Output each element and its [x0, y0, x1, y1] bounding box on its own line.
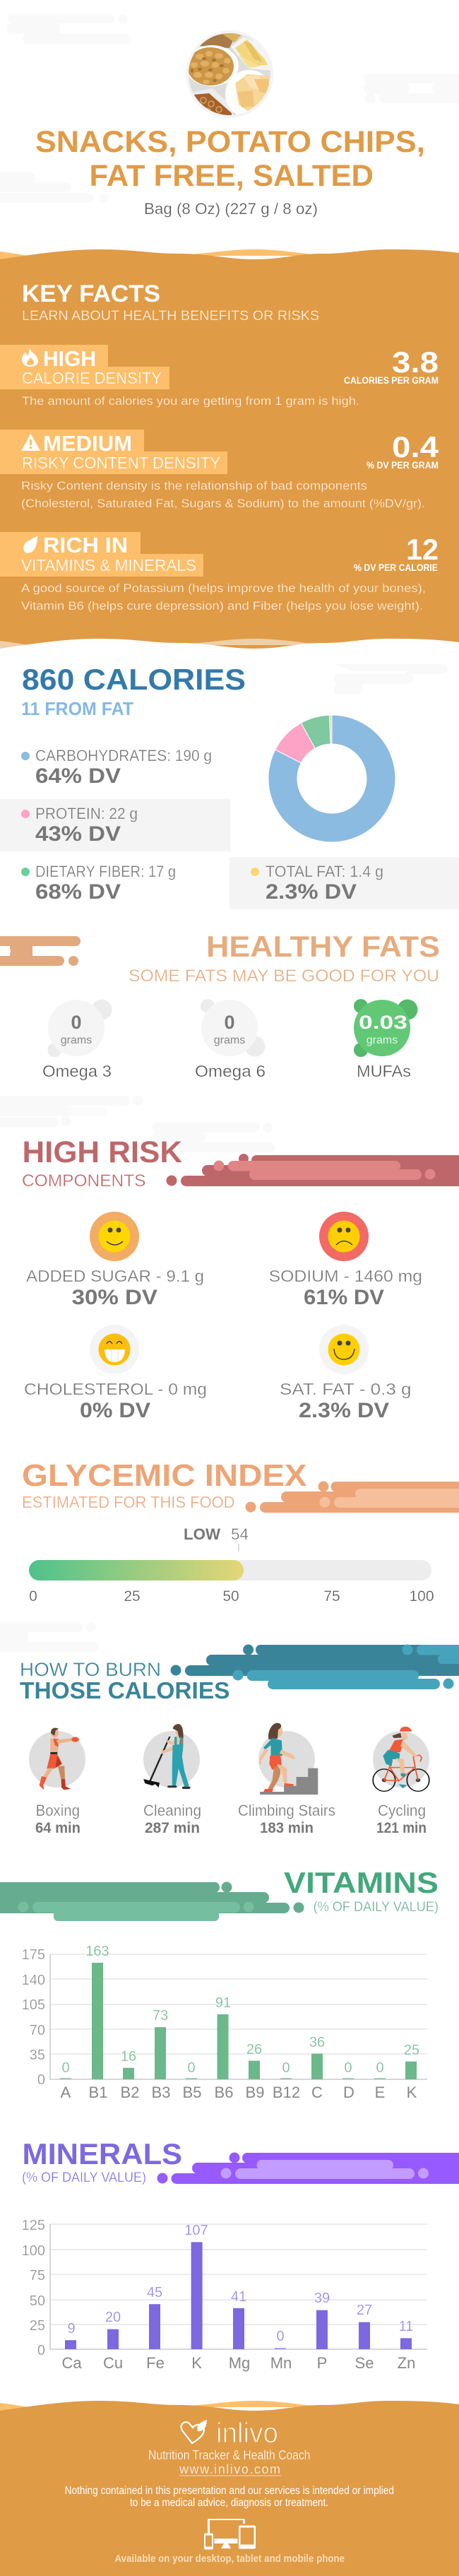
activity: boxing: 64 min [35, 1820, 81, 1836]
heading: key facts: LEARN ABOUT HEALTH BENEFITS OR RISKS [22, 308, 319, 324]
gauge label: low 54 [184, 1525, 249, 1552]
item: added sugar: 30% DV [72, 1286, 157, 1309]
bar chart: minerals: 9 [67, 2321, 76, 2336]
bar chart: vitamins: 0 [376, 2060, 384, 2076]
bar chart: minerals: Mg [229, 2354, 250, 2372]
bar chart: vitamins: 0 [187, 2060, 196, 2076]
bar chart: minerals: 20 [105, 2310, 121, 2325]
availability note: Available on your desktop, tablet and mobile phone [114, 2553, 345, 2565]
icon: cyclist [373, 1727, 429, 1791]
heading: high risk: HIGH RISK [23, 1135, 182, 1169]
legend: total fat: TOTAL FAT: 1.4 g [266, 863, 383, 880]
gauge scale [29, 1588, 434, 1605]
stat: MUFAs: MUFAs [357, 1062, 411, 1080]
serving size subtitle: Bag (8 Oz) (227 g / 8 oz) [144, 200, 318, 218]
bar chart: vitamins: 0 [61, 2060, 70, 2076]
gauge label: low 54: 54 [231, 1525, 249, 1543]
header image: bowl of snacks [185, 30, 274, 120]
heading: key facts [22, 280, 319, 324]
item: added sugar: ADDED SUGAR - 9.1 g [26, 1267, 204, 1285]
activity: cycling [373, 1727, 429, 1836]
heading: healthy fats: SOME FATS MAY BE GOOD FOR YOU [129, 967, 439, 986]
icon: sad face [328, 1221, 360, 1252]
bar chart: minerals: Mn [270, 2354, 292, 2372]
bar chart: minerals: 39 [314, 2291, 330, 2306]
item: sodium [269, 1212, 422, 1309]
heading: vitamins: (% OF DAILY VALUE) [314, 1900, 439, 1915]
decorative banner: burn [171, 1645, 459, 1689]
gauge scale: 25 [124, 1588, 141, 1605]
bar chart: minerals: 0 [276, 2329, 285, 2344]
row: high calorie density: 3.8 [392, 345, 439, 379]
item: added sugar [26, 1212, 204, 1309]
heading: calories: 11 FROM FAT [21, 698, 133, 719]
legend: protein [0, 799, 230, 851]
bar chart: minerals: 107 [184, 2223, 208, 2238]
gauge scale: 0 [29, 1588, 37, 1605]
gauge bar [29, 1560, 431, 1581]
row: medium risky content density: 0.4 [392, 430, 439, 463]
row: rich in vitamins and minerals: 12 [406, 533, 439, 566]
row: high calorie density [0, 345, 439, 408]
title: SNACKS, POTATO CHIPS, [35, 125, 425, 159]
row: medium risky content density: % DV PER GRAM [366, 460, 439, 471]
bar chart: minerals: 27 [357, 2303, 372, 2318]
icon: devices [204, 2519, 256, 2549]
decorative banner: vitamins [0, 1882, 304, 1921]
row: rich in vitamins and minerals [0, 532, 439, 613]
bar chart: vitamins: 26 [246, 2042, 262, 2057]
stat: omega 6 [195, 999, 266, 1080]
stat: MUFAs [354, 999, 418, 1080]
bar chart: vitamins: 0 [282, 2060, 290, 2076]
bar chart: vitamins: B9 [246, 2084, 264, 2101]
row: medium risky content density [0, 430, 439, 510]
bar chart: vitamins: B1 [89, 2084, 107, 2101]
decorative banner: minerals [157, 2152, 459, 2184]
bar chart: minerals: 125 [22, 2218, 45, 2233]
bar chart: vitamins: B3 [152, 2084, 170, 2101]
title [35, 125, 425, 193]
panel: calories [0, 663, 459, 909]
gauge scale: 75 [323, 1588, 340, 1605]
bar chart: vitamins: K [407, 2084, 417, 2101]
bar chart: vitamins: 25 [404, 2043, 419, 2058]
heading: high risk: COMPONENTS [22, 1171, 145, 1190]
legend: protein: PROTEIN: 22 g [35, 805, 138, 822]
row: high calorie density: CALORIES PER GRAM [344, 375, 439, 386]
item: cholesterol [24, 1325, 207, 1422]
icon: grinning face [99, 1334, 130, 1365]
heading: glycemic index: GLYCEMIC INDEX [22, 1458, 307, 1493]
icon: smiling face [99, 1221, 130, 1252]
stat: omega 3: grams [61, 1034, 92, 1046]
bar chart: vitamins: 35 [30, 2048, 45, 2063]
bar chart: vitamins: 36 [309, 2035, 325, 2050]
gauge scale: 50 [222, 1588, 239, 1605]
bar chart: minerals: 0 [37, 2343, 45, 2358]
bar chart: vitamins: 73 [153, 2008, 168, 2023]
item: cholesterol: CHOLESTEROL - 0 mg [24, 1380, 207, 1398]
activity: boxing [29, 1727, 85, 1836]
bar chart: vitamins: 70 [30, 2023, 45, 2038]
gauge scale: 100 [409, 1588, 434, 1605]
bar chart: vitamins: B2 [121, 2084, 139, 2101]
heading: minerals: MINERALS [23, 2137, 182, 2170]
item: sodium: 61% DV [304, 1286, 384, 1309]
bar chart: minerals: 11 [399, 2319, 413, 2334]
heading: calories [21, 663, 246, 719]
bar chart: minerals: 45 [147, 2285, 162, 2300]
heading: healthy fats: HEALTHY FATS [206, 930, 440, 963]
legend: protein: 43% DV [35, 822, 121, 846]
row: rich in vitamins and minerals: % DV PER CALORIE [354, 562, 438, 573]
bar chart: minerals: Ca [62, 2354, 82, 2372]
bar chart: vitamins: 0 [344, 2060, 352, 2076]
stat: omega 3 [42, 999, 112, 1080]
activity: cycling: Cycling [378, 1802, 426, 1819]
activity: cleaning: 287 min [145, 1820, 200, 1836]
panel: high risk components [22, 1135, 459, 1422]
bar chart: vitamins: E [375, 2084, 385, 2101]
stat: MUFAs: grams [366, 1034, 398, 1046]
row: high calorie density: CALORIE DENSITY [22, 369, 162, 387]
legend: dietary fiber [21, 863, 176, 904]
bar chart: vitamins: B12 [273, 2084, 300, 2101]
row: rich in vitamins and minerals: RICH IN [43, 533, 128, 557]
bar chart: minerals: Cu [103, 2354, 123, 2372]
panel: how to burn calories [20, 1645, 459, 1836]
bar chart: vitamins: B6 [215, 2084, 233, 2101]
row: high calorie density: The amount of calories you are getting from 1 gram is high. [22, 394, 359, 408]
row: medium risky content density: (Cholesterol, Saturated Fat, Sugars & Sodium) to the amount (%DV/gr). [21, 497, 425, 510]
bar chart: vitamins: 0 [37, 2072, 45, 2088]
bar chart: minerals: 50 [30, 2293, 45, 2309]
icon: boxer [40, 1727, 79, 1790]
stat: omega 3: Omega 3 [42, 1062, 112, 1080]
row: medium risky content density: RISKY CONTENT DENSITY [22, 454, 220, 472]
activity: cycling: 121 min [376, 1820, 427, 1836]
legend: total fat [230, 857, 459, 909]
disclaimer [65, 2485, 394, 2509]
row: rich in vitamins and minerals: VITAMINS & MINERALS [21, 556, 196, 574]
activity: climbing stairs: 183 min [260, 1820, 314, 1836]
bar chart: vitamins: 16 [121, 2049, 136, 2064]
item: sodium: SODIUM - 1460 mg [269, 1267, 422, 1285]
item: cholesterol: 0% DV [80, 1399, 150, 1422]
panel: footer [0, 2401, 459, 2576]
bar chart: vitamins: 140 [22, 1973, 45, 1988]
row: rich in vitamins and minerals: A good source of Potassium (helps improve the health of your bones), [21, 581, 426, 595]
disclaimer: Nothing contained in this presentation and our services is intended or implied [65, 2485, 394, 2497]
legend: total fat: 2.3% DV [266, 880, 357, 904]
heading: calories: 860 CALORIES [22, 663, 246, 696]
bar chart: vitamins: A [61, 2084, 71, 2101]
icon: leaf [23, 536, 37, 553]
bar chart: vitamins: 163 [85, 1944, 109, 1959]
bar chart: minerals: 100 [22, 2243, 45, 2259]
decorative banner: high risk [167, 1154, 459, 1186]
bar chart: vitamins: 105 [22, 1997, 45, 2013]
heading: how to burn those calories: THOSE CALORIES [20, 1677, 230, 1703]
website link: www.inlivo.com [179, 2462, 280, 2476]
panel: glycemic index [22, 1458, 459, 1605]
panel: minerals [22, 2137, 459, 2372]
bar chart: vitamins: C [311, 2084, 323, 2101]
bar chart: minerals: 75 [30, 2268, 45, 2283]
decorative banner: glycemic index [246, 1481, 459, 1513]
icon: person on stairs [259, 1723, 318, 1795]
bar chart: minerals: 41 [231, 2289, 246, 2305]
heading: glycemic index [22, 1458, 307, 1511]
bar chart: minerals: P [317, 2354, 327, 2372]
stat: omega 6: 0 [224, 1012, 235, 1033]
bar chart: vitamins: 91 [215, 1995, 231, 2011]
bar chart: minerals: Se [355, 2354, 374, 2372]
panel: healthy fats [0, 930, 440, 1080]
stat: MUFAs: 0.03 [359, 1012, 407, 1033]
row: medium risky content density: Risky Content density is the relationship of bad components [21, 479, 367, 492]
activity: boxing: Boxing [36, 1802, 80, 1819]
tagline: Nutrition Tracker & Health Coach [148, 2448, 311, 2462]
stat: omega 6: Omega 6 [195, 1062, 266, 1080]
bar chart: vitamins: D [343, 2084, 354, 2101]
activity: cleaning [143, 1724, 201, 1836]
logo: inlivo: inlivo [216, 2418, 278, 2449]
logo: inlivo [181, 2418, 278, 2449]
heading: vitamins: VITAMINS [284, 1866, 439, 1899]
row: high calorie density: HIGH [43, 346, 96, 371]
stat: omega 6: grams [214, 1034, 245, 1046]
row: rich in vitamins and minerals: Vitamin B6 (helps cure depression) and Fiber (helps you lose weight). [21, 599, 423, 613]
item: saturated fat: 2.3% DV [299, 1399, 389, 1422]
heading: healthy fats [129, 930, 440, 986]
title: FAT FREE, SALTED [89, 159, 374, 193]
icon: person sweeping [143, 1724, 190, 1789]
legend: dietary fiber: 68% DV [35, 880, 121, 904]
legend: carbohydrates: CARBOHYDRATES: 190 g [35, 747, 212, 764]
bar chart: minerals [22, 2218, 427, 2372]
heading: minerals [22, 2137, 182, 2185]
heading: how to burn those calories: HOW TO BURN [20, 1659, 161, 1680]
item: saturated fat [280, 1325, 411, 1422]
heading: vitamins [284, 1866, 439, 1915]
heading: high risk [22, 1135, 182, 1190]
activity: climbing stairs [238, 1723, 335, 1836]
heading: how to burn those calories [20, 1659, 230, 1703]
activity: cleaning: Cleaning [143, 1802, 201, 1819]
stat: omega 3: 0 [71, 1012, 82, 1033]
icon: warning triangle [21, 434, 40, 451]
bar chart: vitamins: B5 [183, 2084, 201, 2101]
bar chart: minerals: Fe [146, 2354, 165, 2372]
icon: flame [22, 348, 38, 367]
item: saturated fat: SAT. FAT - 0.3 g [280, 1380, 411, 1398]
heading: minerals: (% OF DAILY VALUE) [22, 2170, 146, 2185]
activity: climbing stairs: Climbing Stairs [238, 1802, 335, 1819]
legend: carbohydrates [21, 747, 212, 788]
disclaimer: to be a medical advice, diagnosis or treatment. [130, 2497, 328, 2509]
icon: happy face [328, 1334, 360, 1365]
gauge label: low 54: LOW [184, 1525, 220, 1543]
bar chart: vitamins: 175 [22, 1947, 45, 1963]
donut chart: macronutrients [268, 715, 395, 842]
bar chart: vitamins [22, 1944, 427, 2101]
heading: key facts: KEY FACTS [22, 280, 160, 307]
legend: dietary fiber: DIETARY FIBER: 17 g [35, 863, 176, 880]
heading: glycemic index: ESTIMATED FOR THIS FOOD [22, 1493, 234, 1511]
bar chart: minerals: 25 [30, 2318, 45, 2334]
panel: vitamins [0, 1866, 439, 2101]
panel: key facts [0, 249, 459, 654]
decorative banner: healthy fats [0, 936, 81, 966]
legend: carbohydrates: 64% DV [35, 764, 121, 788]
bar chart: minerals: K [191, 2354, 202, 2372]
row: medium risky content density: MEDIUM [43, 431, 132, 456]
bar chart: minerals: Zn [398, 2354, 415, 2372]
